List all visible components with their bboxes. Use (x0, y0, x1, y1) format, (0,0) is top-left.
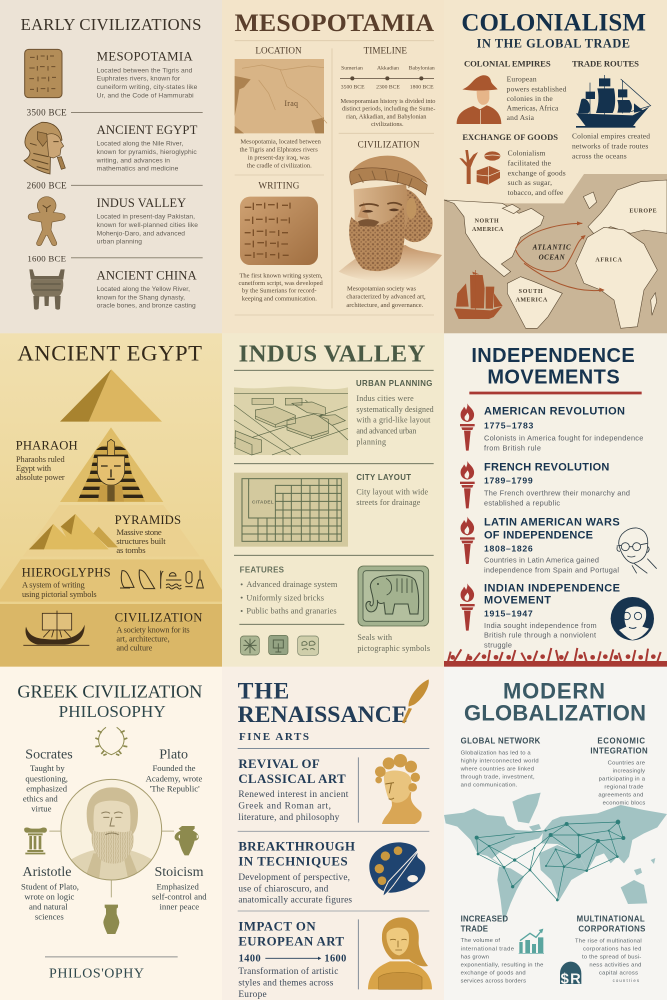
title: ancient egypt: ANCIENT EGYPT (17, 340, 202, 365)
icon: pharaoh head (24, 122, 65, 174)
text block: trade routes: across the oceans (572, 151, 627, 160)
panel: greek civilization (0, 667, 222, 1000)
text block: mesopotamia: Located between the Tigris and (97, 67, 193, 74)
timeline marker: 3500 BCE: 3500 BCE (27, 108, 67, 118)
event: french revolution (460, 461, 630, 508)
event: french revolution: The French overthrew their monarchy and (484, 489, 630, 498)
text block: increased trade: exchange of goods and (461, 970, 526, 976)
event: indian independence movement: 1915–1947 (484, 608, 533, 618)
illustration: city perspective (234, 386, 348, 455)
heading: economic integration (590, 737, 648, 756)
list: features (241, 580, 338, 616)
text block: aristotle: Aristotle (23, 865, 71, 880)
heading: global network: GLOBAL NETWORK (461, 737, 541, 746)
heading: ancient egypt: ANCIENT EGYPT (97, 123, 198, 137)
illustration: crowd silhouette (444, 648, 667, 667)
title: modern globalization: GLOBALIZATION (464, 700, 646, 725)
title: independence movements (471, 345, 635, 389)
section: breakthrough in techniques: Development of perspective, (238, 872, 350, 883)
portrait: philosopher bust (49, 779, 174, 897)
text block: trade routes: Colonial empires created (572, 132, 650, 141)
timeline marker: 2600 BCE: 2600 BCE (27, 181, 67, 191)
section: impact on european art: IMPACT ON (238, 920, 316, 934)
timeline chart: Akkadian (377, 66, 399, 72)
timeline chart: Babylonian (409, 66, 435, 72)
text block: urban planning: and advanced urban (356, 427, 416, 436)
text block: aristotle: Student of Plato, (21, 881, 79, 891)
text block: plato: 'The Republic' (150, 783, 200, 793)
event: american revolution: 1775–1783 (484, 420, 534, 430)
text block: socrates (23, 748, 73, 814)
text block: stoicism: self-control and (152, 891, 207, 901)
event: latin american wars (460, 517, 620, 574)
panel: modern globalization (444, 667, 667, 1000)
heading: increased trade (461, 914, 508, 933)
event: indian independence movement: MOVEMENT (484, 595, 551, 607)
heading: multinational corporations (577, 914, 645, 933)
title: independence movements: INDEPENDENCE (471, 345, 635, 367)
text block: global network: highly interconnected world (461, 758, 539, 764)
event: indian independence movement (460, 583, 620, 650)
tier: civilization: and culture (116, 644, 153, 653)
timeline chart: 1800 BCE (410, 84, 434, 90)
text block: writing: The first known writing system, (239, 272, 323, 279)
text block: urban planning: with a grid-like layout (356, 416, 431, 425)
list: features: Advanced drainage system (246, 580, 338, 589)
map: atlantic trade: SOUTH (519, 289, 543, 295)
text block: timeline: Mesoporamian history is divided into (341, 98, 435, 105)
icon: top pyramid (60, 369, 162, 422)
text block: socrates: Taught by (30, 763, 65, 773)
title: indus valley: INDUS VALLEY (239, 340, 426, 367)
text block: writing: by the Sumerians for record- (242, 288, 317, 295)
event: latin american wars: LATIN AMERICAN WARS (484, 517, 620, 529)
text block: global network: through trade, investment, (461, 774, 535, 780)
text block: writing: keeping and communication. (242, 296, 317, 303)
title: mesopotamia: MESOPOTAMIA (235, 8, 434, 37)
text block: city layout: streets for drainage (356, 498, 421, 507)
subtitle: philosophy: PHILOSOPHY (59, 702, 166, 721)
tier: pyramids: structures built (116, 536, 166, 546)
text block: ancient egypt: Located along the Nile River, (97, 141, 183, 148)
text block: ancient china: oracle bones, and bronze casting (97, 303, 196, 310)
section: revival of classical art: Renewed interest in ancient (238, 790, 349, 800)
heading: city layout: CITY LAYOUT (356, 473, 411, 482)
map: atlantic trade: OCEAN (539, 253, 566, 261)
text block: increased trade: international trade (461, 946, 514, 952)
text block: urban planning: Indus cities were (356, 394, 414, 403)
heading: features: FEATURES (240, 565, 285, 574)
text block: location: in present-day iraq, was (248, 155, 310, 162)
icon: laurel wreath (95, 727, 127, 755)
panel: ancient egypt (0, 333, 222, 667)
heading: exchange of goods: EXCHANGE OF GOODS (462, 132, 558, 142)
map of Iraq (235, 59, 327, 133)
heading: trade routes: TRADE ROUTES (572, 59, 639, 69)
title: the renaissance: THE (238, 679, 289, 705)
list: features: Public baths and granaries (246, 607, 337, 616)
heading: multinational corporations: MULTINATIONAL (577, 914, 645, 923)
text block: indus valley: Located in present-day Pakistan, (97, 214, 195, 221)
text block: location: Mesopotamia, located between (240, 138, 322, 145)
heading: economic integration: ECONOMIC (597, 737, 645, 746)
text block: ancient china: Located along the Yellow River, (97, 286, 190, 293)
text block: socrates: emphasized (26, 783, 68, 793)
text block: colonial empires: colonies in the (507, 94, 553, 103)
text block: economic integration: Countries are (608, 761, 645, 767)
icon: bronze ding vessel (29, 269, 65, 310)
text block: multinational corporations: corporations has led (583, 947, 641, 953)
text block: multinational corporations: The rise of multinational (575, 939, 642, 945)
text block: economic integration: regional trade (604, 785, 643, 791)
panel: mesopotamia (222, 0, 444, 333)
icon: vase (103, 905, 119, 934)
map: atlantic trade: AFRICA (595, 258, 623, 264)
icon: cuneiform tablet (240, 197, 318, 265)
event: american revolution: Colonists in America fought for independence (484, 433, 643, 442)
text block: timeline: civilizations. (371, 121, 404, 128)
subtitle: fine arts: FINE ARTS (239, 731, 309, 743)
heading: mesopotamia: MESOPOTAMIA (97, 49, 193, 63)
heading: civilization: CIVILIZATION (358, 139, 420, 149)
icon: ionic column (24, 828, 47, 854)
tier: hieroglyphs: HIEROGLYPHS (22, 565, 111, 579)
text block: city layout (356, 487, 428, 507)
heading: location: LOCATION (255, 46, 302, 56)
text block: seals: pictographic symbols (357, 644, 430, 653)
text block: city layout: City layout with wide (356, 487, 428, 496)
text block: ancient egypt (96, 141, 197, 173)
tier: pharaoh: Pharaohs ruled (16, 455, 65, 464)
section: breakthrough in techniques: use of chiaroscuro, and (238, 883, 329, 894)
event: indian independence movement: struggle (484, 641, 512, 650)
text block: global network: where countries are linked (460, 766, 534, 772)
section: impact on european art: EUROPEAN ART (238, 934, 344, 948)
event: latin american wars: Countries in Latin America gained (484, 556, 599, 565)
text block: mesopotamia: Ur, and the Code of Hammurabi (97, 92, 194, 99)
title: early civilizations: EARLY CIVILIZATIONS (21, 15, 201, 34)
world map with network (444, 793, 667, 923)
icon: corporate dollar logo (560, 962, 581, 987)
section: impact on european art: 1400 (239, 953, 261, 964)
text block: indus valley: Mohenjo-Daro, and advanced (97, 230, 185, 237)
icon: gandhi round portrait (611, 597, 654, 640)
text block: seals: Seals with (357, 633, 392, 642)
text block: socrates: questioning, (25, 773, 68, 783)
map: atlantic trade: ATLANTIC (532, 243, 571, 251)
text block: exchange of goods: such as sugar, (508, 178, 552, 187)
text block: aristotle: and natural (29, 901, 68, 911)
section: revival of classical art: REVIVAL OF (238, 757, 320, 771)
portrait: bearded Mesopotamian king (339, 156, 442, 282)
footer label: PHILOS'OPHY (49, 966, 144, 981)
text block: ancient egypt: mathematics and medicine (97, 166, 179, 173)
title: independence movements: MOVEMENTS (487, 367, 620, 389)
tier: pyramids: Massive stone (116, 527, 162, 537)
section: breakthrough in techniques: IN TECHNIQUES (238, 854, 348, 868)
tier: pharaoh: PHARAOH (16, 439, 78, 453)
text block: ancient china (97, 286, 196, 310)
text block: socrates: virtue (31, 804, 52, 814)
icon: corporate dollar logo: $R (561, 971, 581, 987)
text block: civilization: characterized by advanced art, (346, 294, 426, 301)
text block: increased trade: services across borders (461, 978, 526, 984)
section: breakthrough in techniques: BREAKTHROUGH (238, 840, 355, 854)
icon: colonial man (457, 75, 501, 124)
title: modern globalization: MODERN (503, 679, 605, 704)
tier: hieroglyphs (0, 559, 222, 602)
text block: ancient egypt: writing, and advances in (96, 157, 170, 164)
text block: location: the cradle of civilization. (247, 162, 312, 169)
timeline marker: 1600 BCE: 1600 BCE (27, 253, 66, 263)
text block: urban planning (356, 394, 434, 446)
icon: sugar cane, coffee and sugar cubes (459, 150, 500, 185)
text block: colonial empires (507, 75, 567, 122)
text block: aristotle (21, 865, 79, 921)
text block: increased trade (461, 938, 543, 984)
text block: global network: and communication. (461, 782, 518, 788)
text block: aristotle: sciences (35, 911, 64, 921)
text block: plato: Founded the (152, 763, 196, 773)
tier: pyramids (23, 505, 200, 557)
list: features: Uniformly sized bricks (246, 593, 324, 602)
title: colonialism: COLONIALISM (461, 10, 646, 37)
text block: exchange of goods: Colonialism (508, 149, 546, 158)
text block: colonial empires: powers established (507, 84, 567, 93)
panel: the renaissance (222, 667, 444, 1000)
text block: writing (239, 272, 324, 303)
tier: hieroglyphs: A system of writing (22, 581, 85, 590)
illustration: city grid plan (234, 473, 348, 547)
text block: civilization: Mesopotamian society was (347, 286, 416, 293)
text block: location: the Tigris and Elphrates rivers (240, 146, 318, 153)
text block: colonial empires: European (507, 75, 537, 84)
text block: multinational corporations: to the spread of busi- (582, 955, 641, 961)
text block: location (240, 138, 322, 169)
section: revival of classical art: CLASSICAL ART (238, 772, 346, 786)
text block: seals (357, 633, 430, 653)
text block: indus valley: urban planning (97, 239, 142, 246)
text block: increased trade: exponentially, resulting in the (461, 962, 543, 968)
heading: indus valley: INDUS VALLEY (97, 196, 186, 210)
text block: civilization: architecture, and governance. (346, 302, 424, 309)
tier: civilization (0, 604, 222, 667)
map: atlantic trade (444, 174, 667, 333)
text block: mesopotamia: Euphrates rivers, known for (97, 76, 181, 83)
panel: colonialism (444, 0, 667, 333)
text block: exchange of goods: facilitated the (508, 159, 552, 168)
text block: economic integration (598, 761, 646, 807)
title: modern globalization (464, 679, 646, 725)
text block: timeline (341, 98, 435, 128)
text block: ancient egypt: known for pyramids, hieroglyphic (97, 149, 197, 156)
icon: rust sailing ship (454, 270, 503, 319)
event: latin american wars: independence from Spain and Portugal (484, 565, 619, 574)
text block: increased trade: has grown (461, 954, 489, 960)
text block: trade routes (572, 132, 650, 160)
text block: stoicism: Stoicism (155, 865, 204, 880)
text block: increased trade: The volume of (461, 938, 500, 944)
heading: ancient china: ANCIENT CHINA (97, 268, 198, 282)
heading: writing: WRITING (258, 180, 300, 190)
text block: colonial empires: and Asia (507, 113, 535, 122)
tier: pyramids: as tombs (116, 545, 146, 555)
section: breakthrough in techniques (238, 840, 355, 906)
icon: navy sailing ship (576, 75, 651, 128)
illustration: classical head bust (375, 754, 422, 824)
text block: plato: Plato (159, 748, 188, 763)
tier: pharaoh: absolute power (16, 473, 65, 482)
title: the renaissance (238, 679, 408, 728)
text block: socrates: ethics and (23, 794, 58, 804)
map: atlantic trade: EUROPE (629, 209, 657, 215)
tier: civilization: art, architecture, (116, 634, 170, 643)
heading: increased trade: TRADE (461, 924, 488, 933)
event: american revolution: AMERICAN REVOLUTION (484, 406, 625, 418)
illustration: city grid plan: CITADEL (252, 499, 274, 504)
section: impact on european art: Europe (238, 990, 267, 1000)
section: revival of classical art: literature, and philosophy (238, 813, 340, 823)
timeline chart (340, 66, 435, 90)
section: revival of classical art: Greek and Roman art, (238, 801, 331, 811)
tier: pyramids: PYRAMIDS (115, 513, 181, 527)
text block: timeline: distinct periods, including the Sume- (342, 106, 435, 113)
section: impact on european art: 1600 (324, 953, 346, 964)
timeline chart: 3500 BCE (341, 84, 365, 90)
event: french revolution: established a republic (484, 498, 560, 507)
map: atlantic trade: NORTH (475, 218, 499, 224)
text block: indus valley (97, 214, 198, 246)
tier: civilization: A society known for its (116, 625, 190, 634)
event: american revolution (460, 403, 643, 452)
text block: mesopotamia: cuneiform writing, city-states like (97, 84, 198, 91)
panel: independence movements (444, 333, 667, 667)
map: atlantic trade: AMERICA (516, 298, 548, 304)
text block: stoicism: inner peace (160, 901, 199, 911)
panel: early civilizations (0, 0, 222, 333)
heading: economic integration: INTEGRATION (590, 747, 648, 756)
text block: multinational corporations: countries (613, 978, 639, 983)
icon: elephant seal (358, 566, 429, 626)
heading: multinational corporations: CORPORATIONS (578, 924, 645, 933)
text block: urban planning: systematically designed (356, 405, 434, 414)
tier: hieroglyphs: using pictorial symbols (22, 590, 97, 599)
tier: civilization: CIVILIZATION (115, 610, 202, 624)
text block: economic integration: economic blocs (603, 801, 645, 807)
event: french revolution: FRENCH REVOLUTION (484, 461, 609, 473)
heading: increased trade: INCREASED (461, 914, 508, 923)
panel: indus valley (222, 333, 444, 667)
text block: civilization (346, 286, 426, 309)
text block: multinational corporations (575, 939, 642, 983)
heading: timeline: TIMELINE (364, 46, 407, 56)
text block: timeline: rian, Akkadian, and Babylonian (346, 113, 427, 120)
text block: global network (460, 750, 539, 788)
text block: economic integration: participating in a (599, 777, 646, 783)
text block: stoicism: Emphasized (157, 881, 199, 891)
event: latin american wars: OF INDEPENDENCE (484, 529, 593, 541)
timeline chart: 2300 BCE (376, 84, 400, 90)
text block: socrates: Socrates (25, 748, 73, 763)
event: latin american wars: 1808–1826 (484, 543, 533, 553)
text block: colonial empires: Americas, Africa (507, 104, 559, 113)
title: the renaissance: RENAISSANCE (238, 702, 408, 728)
event: french revolution: 1789–1799 (484, 476, 533, 486)
heading: colonial empires: COLONIAL EMPIRES (464, 59, 551, 69)
text block: mesopotamia (97, 67, 198, 99)
text block: multinational corporations: ness activities and (589, 963, 641, 969)
section: impact on european art: styles and themes across (238, 978, 334, 988)
event: indian independence movement: INDIAN INDEPENDENCE (484, 583, 620, 595)
map of Iraq: Iraq (284, 99, 298, 108)
tier: pharaoh (16, 427, 163, 502)
text block: economic integration: agreements and (598, 793, 643, 799)
icon: painter palette (369, 842, 425, 896)
icon: clay tablet (25, 49, 62, 98)
event: american revolution: from British rule (484, 443, 541, 452)
title: greek civilization: GREEK CIVILIZATION (17, 681, 202, 701)
section: impact on european art: Transformation of artistic (238, 966, 338, 977)
tier: pharaoh: Egypt with (16, 464, 52, 473)
subtitle: IN THE GLOBAL TRADE (477, 37, 630, 51)
text block: urban planning: planning (356, 437, 386, 446)
section: breakthrough in techniques: anatomically accurate figures (238, 895, 352, 906)
text block: exchange of goods (508, 149, 566, 197)
section: impact on european art (238, 920, 346, 1000)
text block: indus valley: known for well-planned cities like (97, 222, 198, 229)
text block: plato: Academy, wrote (146, 773, 202, 783)
icon: clay figurine (28, 197, 65, 246)
text block: aristotle: wrote on logic (24, 891, 74, 901)
illustration: renaissance woman portrait (368, 917, 432, 989)
text block: trade routes: networks of trade routes (572, 142, 648, 151)
text block: ancient china: known for the Shang dynasty, (97, 294, 185, 301)
icon: gandhi line portrait (617, 528, 657, 573)
text block: economic integration: increasingly (613, 769, 645, 775)
text block: exchange of goods: tobacco, and offee (508, 188, 564, 197)
event: indian independence movement: India sought independence from (484, 621, 597, 630)
icons: small seals (240, 635, 319, 655)
icon: paintbrush (402, 679, 429, 723)
map: atlantic trade: AMERICA (472, 227, 504, 233)
text block: plato (146, 748, 202, 793)
event: indian independence movement: British rule through a nonviolent (484, 631, 596, 640)
icon: growth bar chart (519, 929, 544, 953)
text block: stoicism (152, 865, 207, 911)
text block: exchange of goods: exchange of goods (508, 168, 566, 177)
heading: urban planning: URBAN PLANNING (356, 379, 432, 388)
text block: multinational corporations: capital across (599, 971, 638, 977)
timeline chart: Sumerian (341, 66, 363, 72)
text block: writing: cuneiform script, was developed (239, 280, 324, 287)
text block: global network: Globalization has led to a (461, 750, 531, 756)
icon: amphora (175, 826, 199, 855)
section: revival of classical art (238, 757, 349, 823)
